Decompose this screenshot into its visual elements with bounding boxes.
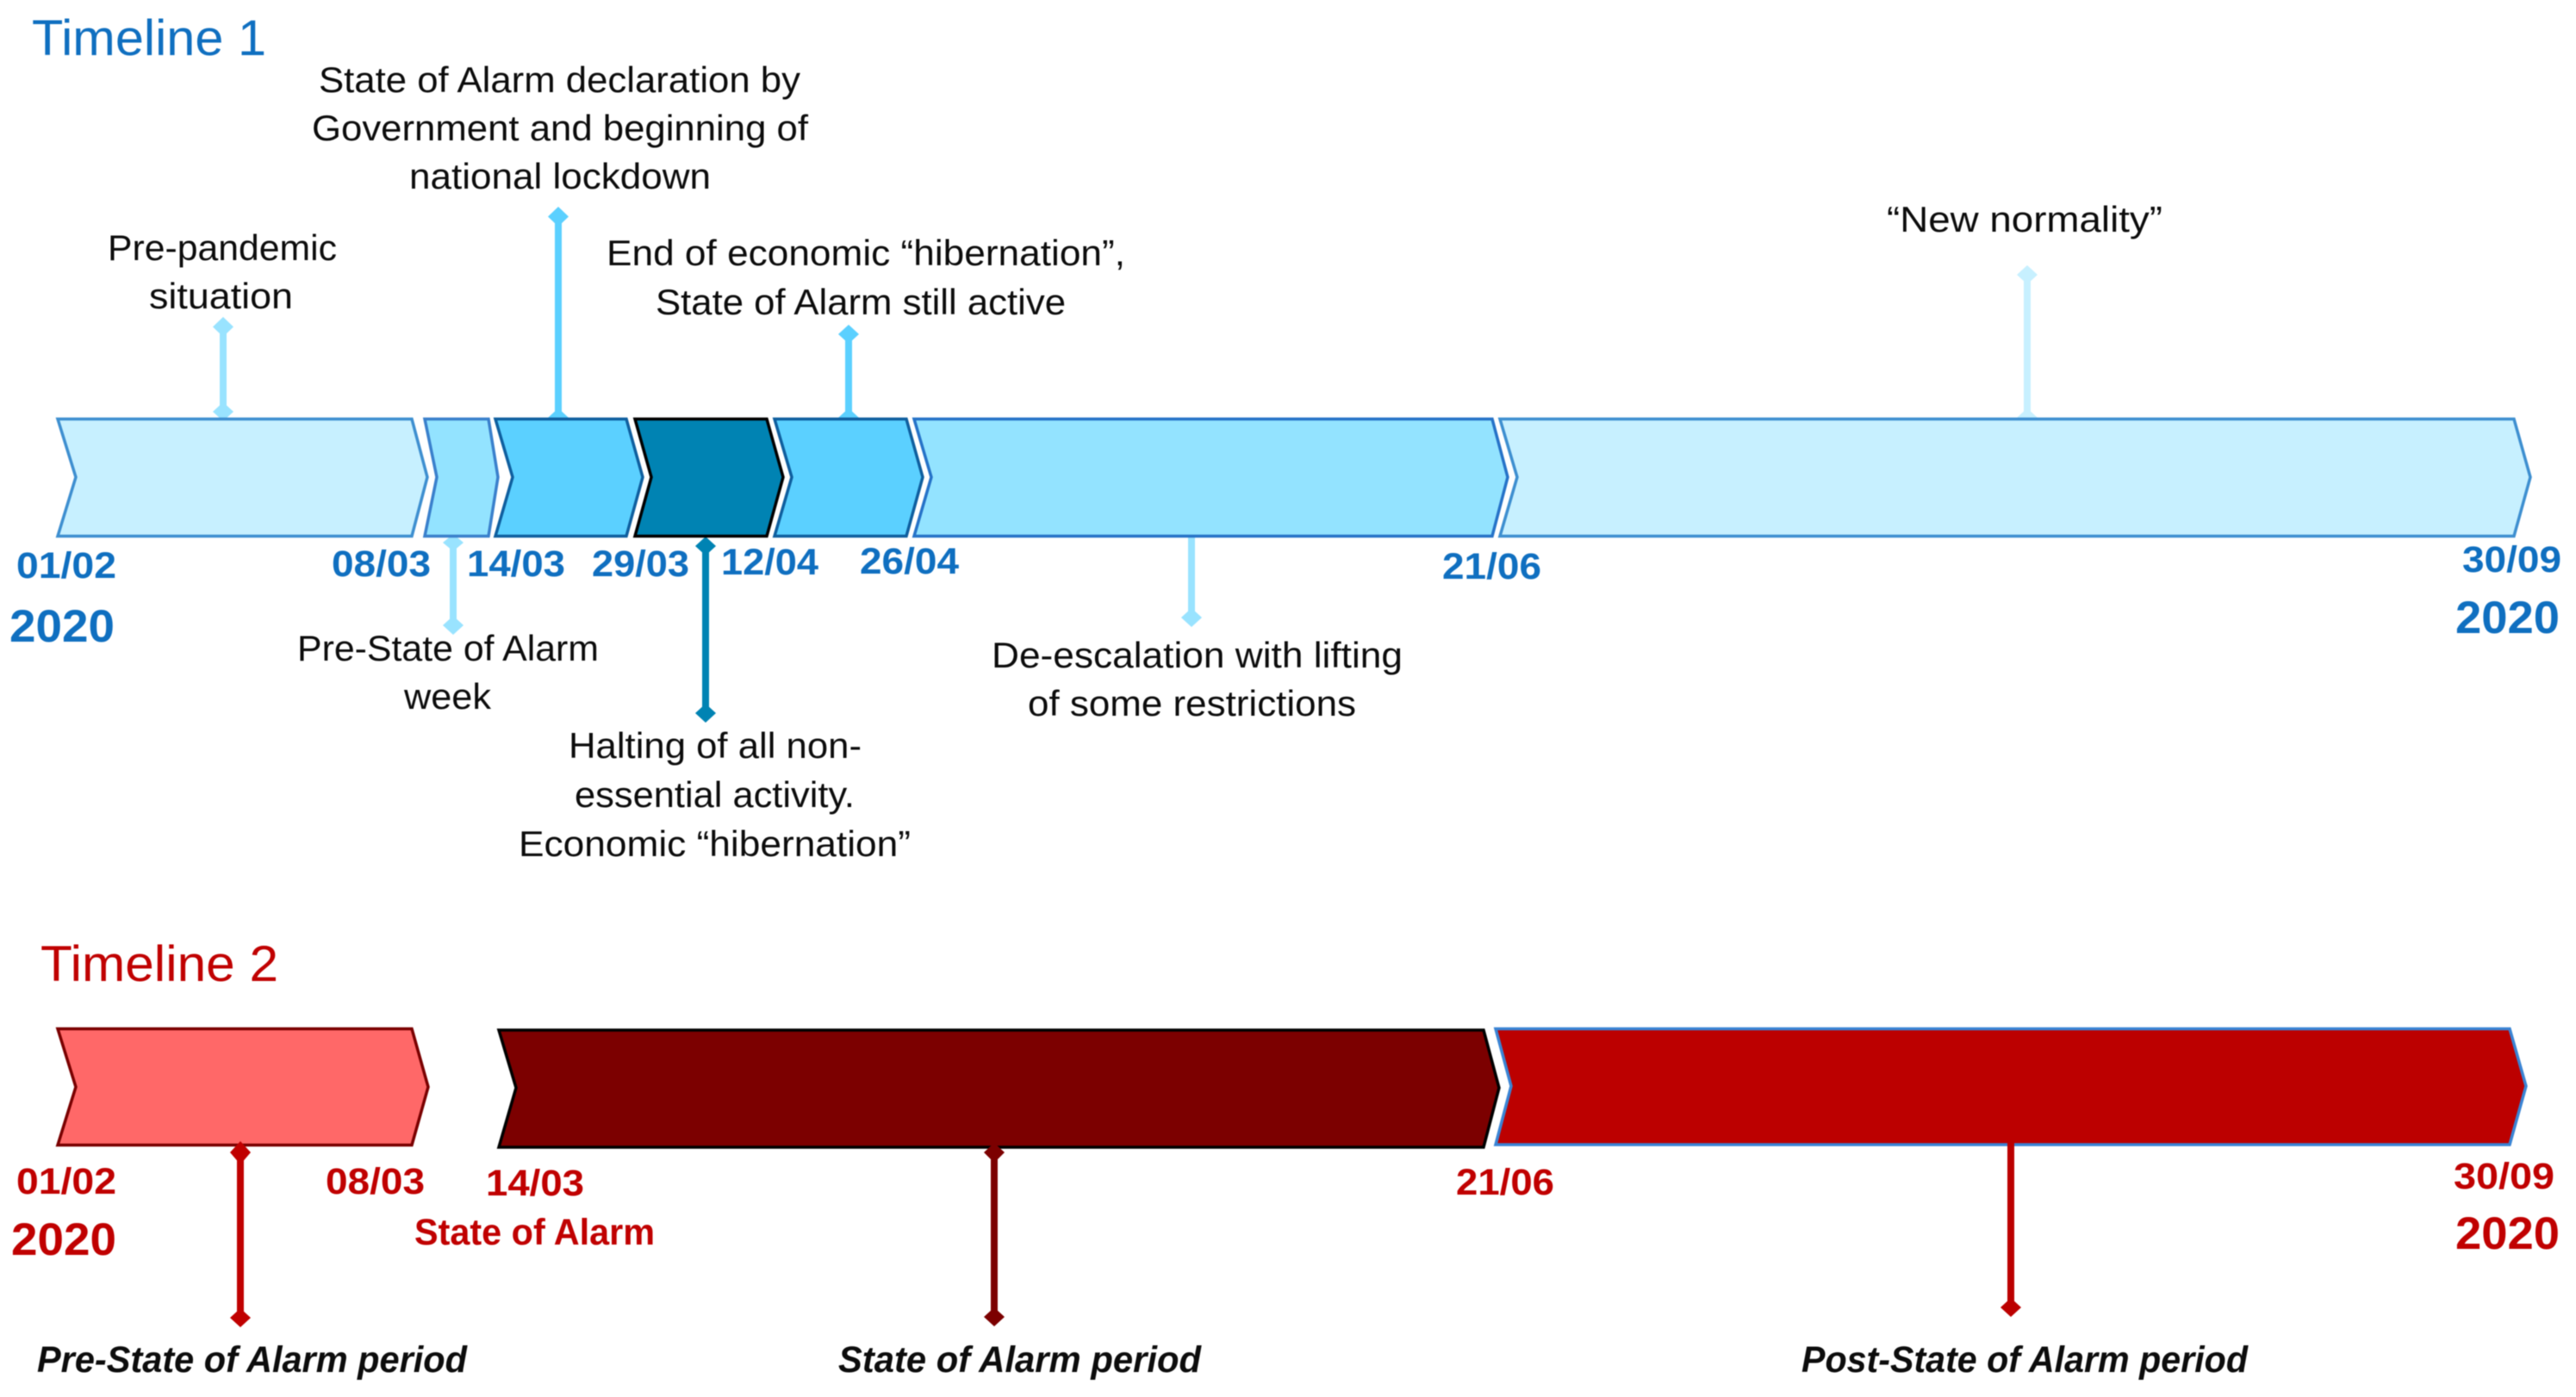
text: pre-pandemic situation: [108, 227, 337, 316]
text: pre-State of Alarm week: Pre-State of Alarm: [297, 628, 599, 668]
label: State of Alarm: State of Alarm: [414, 1212, 655, 1253]
chevron: 14/03 to 29/03: [495, 419, 643, 536]
text: pre-State of Alarm week: [297, 628, 599, 717]
leader: halting of activity: [695, 537, 716, 723]
text: state of alarm declaration: [312, 59, 808, 196]
leader: post-State of Alarm period: [2000, 1143, 2021, 1317]
text: halting of activity: essential activity.: [575, 774, 855, 815]
date: 14/03: 14/03: [467, 543, 565, 585]
text: de-escalation: of some restrictions: [1028, 683, 1356, 723]
chevron: 12/04 to 26/04: [775, 419, 923, 536]
leader: pre-State of Alarm week: [443, 534, 464, 635]
text: end of economic hibernation: State of Alarm still active: [656, 282, 1066, 322]
label: pre-State of Alarm period: Pre-State of Alarm period: [37, 1339, 468, 1381]
text: halting of activity: [519, 725, 911, 864]
date: 21/06: 21/06: [1442, 546, 1541, 587]
text: pre-State of Alarm week: week: [403, 676, 492, 717]
leader: pre-State of Alarm period: [230, 1141, 251, 1327]
leader: State of Alarm period: [984, 1143, 1005, 1326]
date: 08/03: 08/03: [332, 543, 431, 585]
leader: end of economic hibernation: [838, 325, 859, 427]
chevron: State of Alarm: [499, 1030, 1499, 1147]
chevron: 29/03 to 12/04: [635, 419, 783, 536]
label: post-State of Alarm period: Post-State of Alarm period: [1801, 1339, 2249, 1381]
heading: Timeline 2: Timeline 2: [40, 936, 278, 992]
leader: pre-pandemic situation: [213, 317, 233, 421]
text: new normality: “New normality”: [1887, 199, 2162, 239]
text: halting of activity: Economic “hibernation”: [519, 823, 911, 864]
date: 29/03: 29/03: [592, 543, 689, 585]
text: end of economic hibernation: [607, 233, 1125, 322]
chevron: 21/06 to 30/09: [1500, 419, 2530, 536]
text: end of economic hibernation: End of economic “hibernation”,: [607, 233, 1125, 273]
text: state of alarm declaration: national lockdown: [409, 156, 711, 196]
chevron: 26/04 to 21/06: [914, 419, 1508, 536]
date: 01/02: 01/02: [16, 545, 116, 587]
panel: timeline 2: [11, 936, 2560, 1381]
leader: new normality: [2017, 265, 2038, 427]
chevron: 01/02 to 08/03: [58, 419, 427, 536]
text: state of alarm declaration: State of Alarm declaration by: [319, 59, 800, 100]
date: 26/04: 26/04: [860, 541, 959, 582]
date: 01/02: 01/02: [16, 1161, 116, 1202]
leader: state of alarm declaration: [548, 207, 569, 427]
leader: de-escalation: [1181, 534, 1202, 627]
year: end: 2020: [2455, 1208, 2560, 1259]
text: halting of activity: Halting of all non-: [569, 725, 862, 766]
heading: Timeline 1: Timeline 1: [32, 10, 266, 66]
chevron: 08/03 to 14/03: [425, 419, 498, 536]
text: de-escalation: De-escalation with lifting: [992, 635, 1403, 675]
chevron: pre-State of Alarm: [58, 1028, 428, 1146]
year: start: 2020: [11, 1214, 116, 1265]
date: 30/09: 30/09: [2462, 539, 2561, 581]
date: 08/03: 08/03: [326, 1161, 425, 1202]
text: pre-pandemic situation: Pre-pandemic: [108, 227, 337, 268]
panel: timeline 1: [9, 10, 2561, 864]
text: state of alarm declaration: Government and beginning of: [312, 108, 808, 148]
text: pre-pandemic situation: situation: [149, 276, 293, 316]
year: end: 2020: [2455, 593, 2560, 643]
date: 14/03: 14/03: [486, 1163, 584, 1204]
label: State of Alarm period: State of Alarm period: [838, 1339, 1202, 1381]
chevron: post-State of Alarm: [1496, 1028, 2526, 1145]
date: 21/06: 21/06: [1456, 1162, 1554, 1203]
year: start: 2020: [9, 601, 115, 652]
text: de-escalation: [992, 635, 1403, 723]
date: 30/09: 30/09: [2454, 1156, 2554, 1197]
date: 12/04: 12/04: [721, 542, 818, 583]
